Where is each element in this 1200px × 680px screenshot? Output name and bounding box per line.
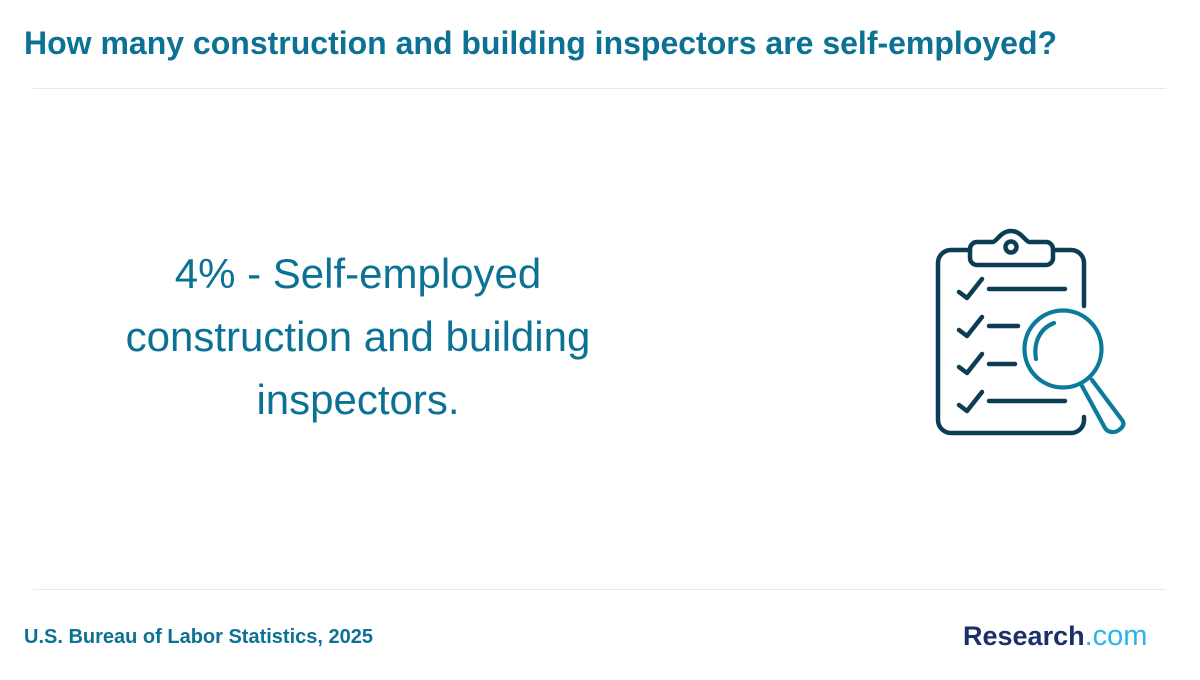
title: How many construction and building inspectors are self-employed?: [24, 25, 1057, 61]
statistic text: [126, 250, 590, 423]
icon: clipboard checklist with magnifying glass: [936, 228, 1126, 436]
statistic text: inspectors.: [256, 376, 460, 423]
statistic text: 4% - Self-employed: [175, 250, 541, 297]
logo: Research.com: [963, 620, 1147, 652]
statistic text: construction and building: [126, 313, 590, 360]
source: U.S. Bureau of Labor Statistics, 2025: [24, 626, 373, 648]
